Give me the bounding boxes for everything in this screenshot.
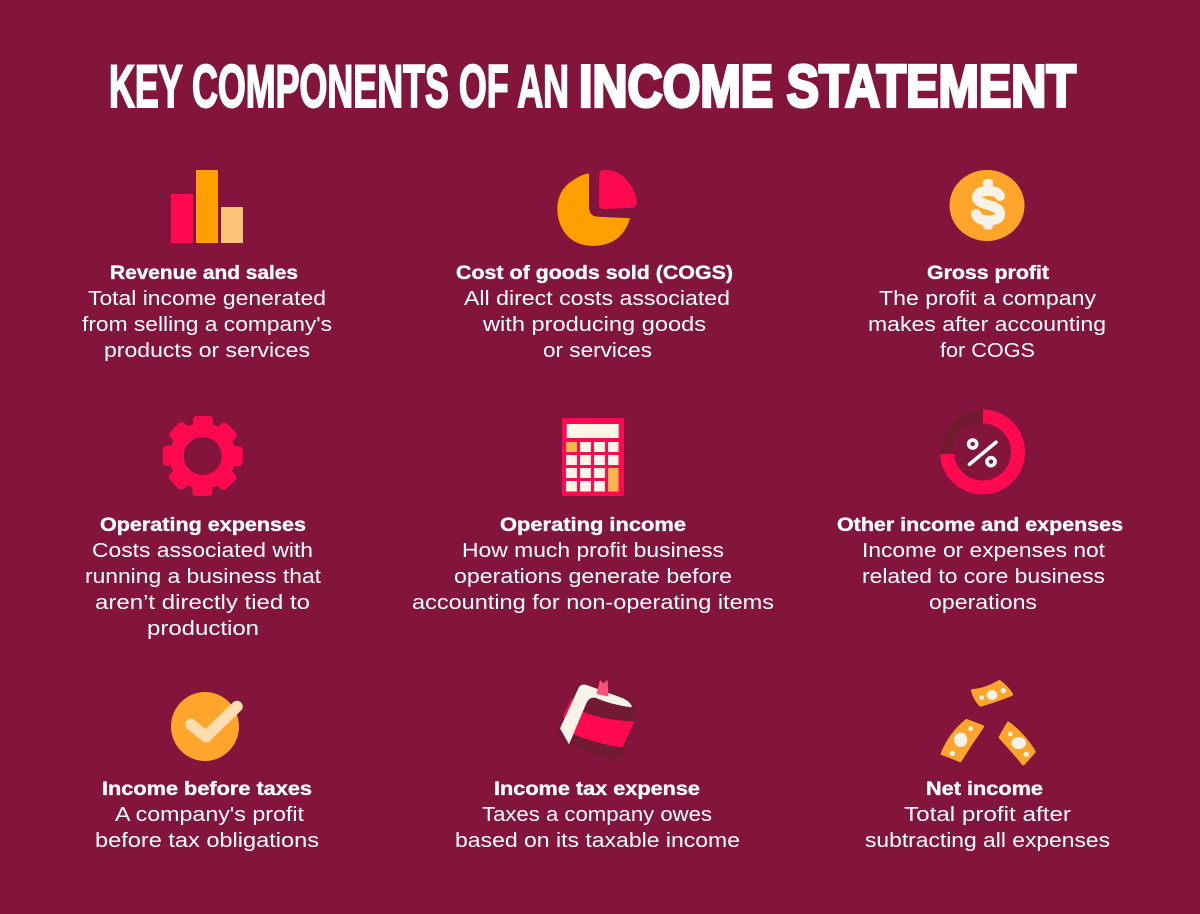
text: other income and expenses	[837, 515, 1123, 614]
icon: dollar coin	[950, 170, 1024, 241]
text: gross profit: for COGS	[940, 340, 1035, 362]
text: income tax expense	[455, 779, 740, 852]
icon: pie chart	[557, 170, 637, 246]
icon: flying banknotes	[942, 682, 1034, 764]
text: other income and expenses: operations	[929, 592, 1037, 614]
text: operating expenses	[85, 515, 321, 640]
icon: percent donut	[947, 416, 1018, 488]
icon: check badge	[171, 692, 239, 761]
text: operating income: accounting for non-operating items	[412, 592, 774, 614]
text: net income	[865, 779, 1110, 852]
text: cost of goods sold: Cost of goods sold (COGS)	[456, 263, 733, 284]
panel: gross profit	[868, 170, 1106, 362]
text: net income: subtracting all expenses	[865, 830, 1110, 852]
panel: revenue and sales	[82, 170, 332, 362]
text: other income and expenses: Income or expenses not	[862, 540, 1105, 562]
text: income before taxes	[95, 779, 319, 852]
text: gross profit: makes after accounting	[868, 314, 1106, 336]
text: revenue and sales: Total income generated	[88, 288, 326, 310]
text: operating income: How much profit business	[462, 540, 724, 562]
text: other income and expenses: related to core business	[862, 566, 1105, 588]
text: gross profit	[868, 263, 1106, 362]
panel: other income and expenses	[837, 416, 1123, 614]
text: revenue and sales: products or services	[104, 340, 310, 362]
icon: gear	[163, 416, 243, 496]
text: income before taxes: before tax obligations	[95, 830, 319, 852]
panel: net income	[865, 682, 1110, 852]
text: revenue and sales	[82, 263, 332, 362]
text: cost of goods sold: with producing goods	[482, 314, 706, 336]
text: net income: Total profit after	[904, 804, 1071, 826]
panel: operating expenses	[85, 416, 321, 640]
text: operating expenses: Costs associated with	[92, 540, 313, 562]
text: operating income: Operating income	[500, 515, 686, 536]
title: INCOME STATEMENT	[579, 54, 1076, 120]
text: income tax expense: Income tax expense	[494, 779, 700, 800]
text: gross profit: Gross profit	[927, 263, 1050, 284]
panel: income before taxes	[95, 692, 319, 852]
text: operating income: operations generate before	[454, 566, 732, 588]
text: cost of goods sold: or services	[543, 340, 652, 362]
panel: income tax expense	[455, 680, 740, 852]
text: income before taxes: Income before taxes	[102, 779, 312, 800]
text: net income: Net income	[926, 779, 1043, 800]
text: revenue and sales: from selling a company's	[82, 314, 332, 336]
text: operating expenses: running a business that	[85, 566, 321, 588]
icon: bar chart	[171, 170, 243, 243]
text: other income and expenses: Other income and expenses	[837, 515, 1123, 536]
text: cost of goods sold: All direct costs associated	[464, 288, 730, 310]
text: income tax expense: based on its taxable income	[455, 830, 740, 852]
text: operating expenses: Operating expenses	[100, 515, 306, 536]
text: operating income	[412, 515, 774, 614]
text: gross profit: The profit a company	[879, 288, 1096, 310]
icon: calculator	[562, 418, 624, 496]
icon: tax ledger book	[558, 680, 636, 759]
panel: operating income	[412, 418, 774, 614]
text: income before taxes: A company's profit	[115, 804, 304, 826]
text: income tax expense: Taxes a company owes	[482, 804, 712, 826]
title: KEY COMPONENTS OF AN	[109, 52, 569, 120]
text: cost of goods sold	[456, 263, 733, 362]
text: revenue and sales: Revenue and sales	[110, 263, 298, 284]
text: operating expenses: aren’t directly tied to	[95, 592, 310, 614]
text: operating expenses: production	[147, 618, 259, 640]
panel: cost of goods sold	[456, 170, 733, 362]
